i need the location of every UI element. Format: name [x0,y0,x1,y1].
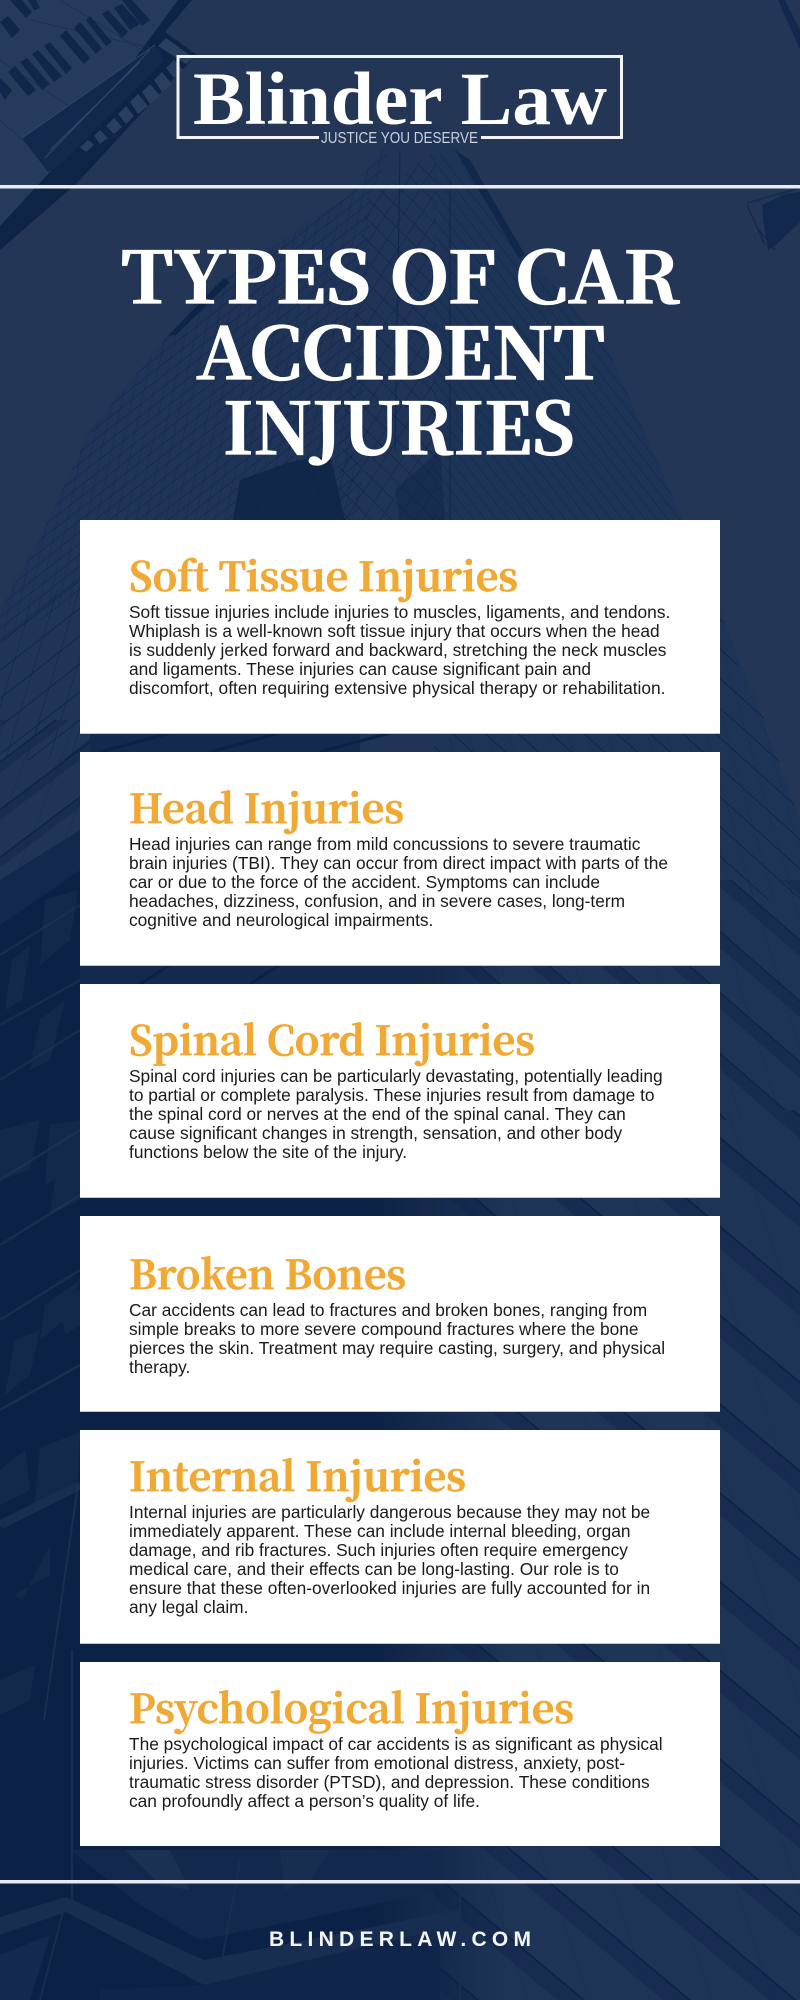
heading: Soft Tissue Injuries [129,546,518,603]
panel: broken bones [80,1216,720,1412]
heading: Head Injuries [129,778,404,835]
body text: therapy. [129,1357,190,1377]
body text: discomfort, often requiring extensive physical therapy or rehabilitation. [129,678,666,698]
body text: immediately apparent. These can include internal bleeding, organ [129,1521,631,1541]
body text: is suddenly jerked forward and backward, stretching the neck muscles [129,640,667,660]
body text: headaches, dizziness, confusion, and in severe cases, long-term [129,891,625,911]
body text: The psychological impact of car accidents is as significant as physical [129,1734,663,1754]
body text [129,1300,665,1377]
body text: ensure that these often-overlooked injuries are fully accounted for in [129,1578,650,1598]
title: INJURIES [223,373,575,475]
bottom rule [0,1880,800,1884]
title [121,222,680,475]
title: TYPES OF CAR [121,222,680,324]
body text [129,1502,650,1617]
body text: cognitive and neurological impairments. [129,910,433,930]
panel: psychological injuries [80,1662,720,1846]
panel: soft tissue injuries [80,520,720,734]
body text: functions below the site of the injury. [129,1142,407,1162]
body text: cause significant changes in strength, sensation, and other body [129,1123,623,1143]
heading: Spinal Cord Injuries [129,1010,535,1067]
panel: spinal cord injuries [80,984,720,1198]
body text [129,602,670,698]
heading: Broken Bones [129,1244,406,1301]
top-left tower [0,0,197,250]
body text: to partial or complete paralysis. These injuries result from damage to [129,1085,655,1105]
body text: Internal injuries are particularly dangerous because they may not be [129,1502,650,1522]
body text: any legal claim. [129,1597,248,1617]
logo: Blinder Law [178,56,622,147]
heading: Internal Injuries [129,1446,466,1503]
top-right corner and crane [747,0,800,250]
heading: Psychological Injuries [129,1678,574,1735]
body text: brain injuries (TBI). They can occur from direct impact with parts of the [129,853,668,873]
footer URL: BLINDERLAW.COM [269,1928,531,1951]
body text: medical care, and their effects can be long-lasting. Our role is to [129,1559,619,1579]
logo tagline: JUSTICE YOU DESERVE [321,130,478,147]
bottom lobby reflections [0,1650,460,2000]
body text: traumatic stress disorder (PTSD), and depression. These conditions [129,1772,650,1792]
body text: and ligaments. These injuries can cause significant pain and [129,659,591,679]
top rule [0,185,800,188]
body text: car or due to the force of the accident. Symptoms can include [129,872,600,892]
body text: damage, and rib fractures. Such injuries often require emergency [129,1540,628,1560]
body text: injuries. Victims can suffer from emotional distress, anxiety, post- [129,1753,625,1773]
panel: head injuries [80,752,720,966]
body text: simple breaks to more severe compound fractures where the bone [129,1319,639,1339]
logo wordmark: Blinder Law [193,58,607,141]
body text [129,834,668,930]
lower-left dark reflections [0,733,510,2000]
body text: Car accidents can lead to fractures and broken bones, ranging from [129,1300,647,1320]
body text: can profoundly affect a person’s quality of life. [129,1791,480,1811]
logo frame [178,56,622,138]
panel: internal injuries [80,1430,720,1644]
body text: Head injuries can range from mild concussions to severe traumatic [129,834,641,854]
body text [129,1066,663,1162]
body text: Whiplash is a well-known soft tissue injury that occurs when the head [129,621,660,641]
body text: Soft tissue injuries include injuries to muscles, ligaments, and tendons. [129,602,670,622]
body text: Spinal cord injuries can be particularly devastating, potentially leading [129,1066,663,1086]
title: ACCIDENT [196,298,605,400]
body text: the spinal cord or nerves at the end of the spinal canal. They can [129,1104,626,1124]
body text: pierces the skin. Treatment may require casting, surgery, and physical [129,1338,665,1358]
body text [129,1734,663,1811]
